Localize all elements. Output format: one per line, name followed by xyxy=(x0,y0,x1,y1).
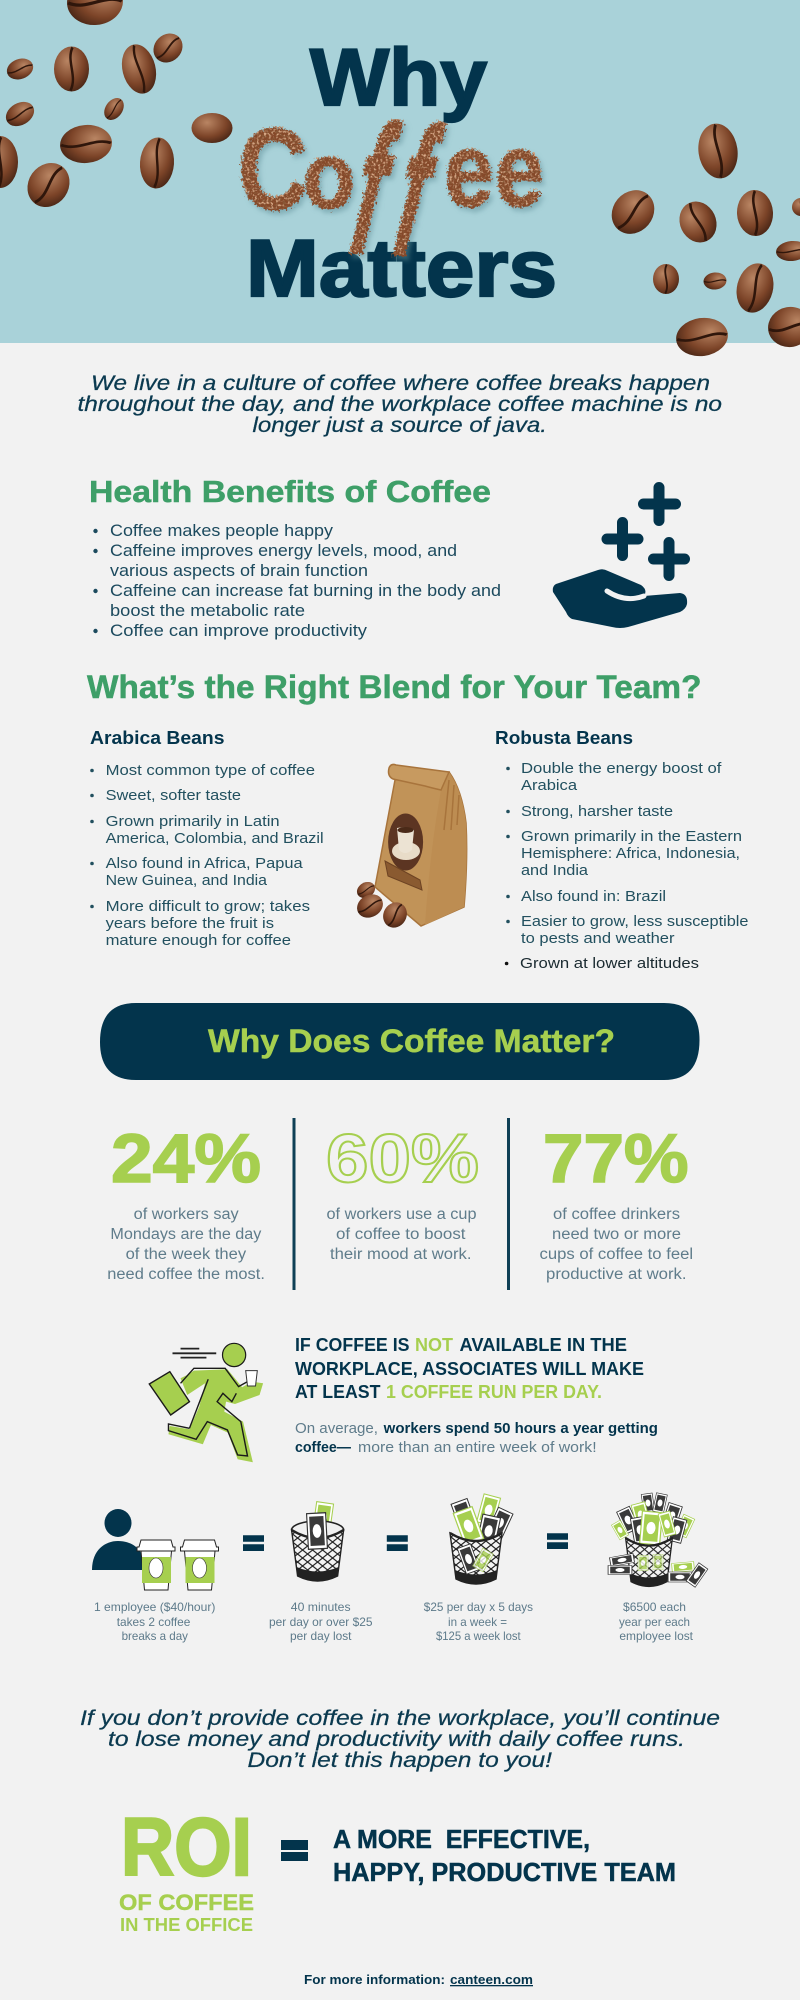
column: arabica beans xyxy=(90,728,324,949)
ROI result text: HAPPY, PRODUCTIVE TEAM xyxy=(333,1857,676,1887)
title: Matters: Matters xyxy=(246,224,557,314)
stat: 77 percent: 77% xyxy=(543,1120,689,1197)
coffee beans left xyxy=(0,0,232,215)
ROI result text: A MORE EFFECTIVE, xyxy=(333,1824,590,1854)
intro paragraph: longer just a source of java. xyxy=(252,413,547,437)
list: robusta: Arabica xyxy=(521,777,578,794)
list: robusta: Grown at lower altitudes xyxy=(520,955,699,972)
footer: For more information: xyxy=(304,1972,445,1987)
panel: ROI xyxy=(119,1802,676,1935)
caption: employee xyxy=(94,1600,215,1643)
list: arabica: Sweet, softer taste xyxy=(106,787,241,804)
closing paragraph: If you don’t provide coffee in the workplace, you’ll continue xyxy=(80,1706,720,1730)
icon: employee with two cups xyxy=(92,1509,218,1590)
ROI result text xyxy=(333,1824,676,1887)
coffee beans right xyxy=(603,121,800,359)
head xyxy=(222,1343,246,1367)
heading: health benefits: Health Benefits of Coffee xyxy=(89,474,491,509)
caption: 6500 each: year per each xyxy=(619,1615,690,1629)
subheading: arabica: Arabica Beans xyxy=(90,728,224,748)
list: health benefits: Caffeine can increase fat burning in the body and xyxy=(110,582,501,600)
list: arabica: mature enough for coffee xyxy=(106,932,291,949)
list: robusta: to pests and weather xyxy=(521,930,674,947)
stat: 77 percent: need two or more xyxy=(552,1226,681,1243)
title: Coffee in coffee grounds xyxy=(238,90,544,293)
list: arabica: Also found in Africa, Papua xyxy=(106,855,303,872)
column: robusta beans xyxy=(495,728,748,972)
panel: statistics xyxy=(107,1118,693,1290)
icon: running businessperson xyxy=(149,1343,263,1462)
stat: 24 percent: need coffee the most. xyxy=(107,1266,265,1283)
banner: why does coffee matter: Why Does Coffee Matter? xyxy=(208,1023,615,1059)
caption: employee: takes 2 coffee xyxy=(117,1615,191,1629)
stat: 24 percent: Mondays are the day xyxy=(110,1226,262,1243)
stat: 24 percent xyxy=(107,1120,265,1283)
stat: 77 percent xyxy=(540,1120,693,1283)
list: robusta: Grown primarily in the Eastern xyxy=(521,828,742,845)
speed lines xyxy=(172,1349,216,1358)
list: robusta xyxy=(505,760,748,972)
divider xyxy=(292,1118,296,1290)
equals sign three xyxy=(547,1533,568,1549)
list: arabica: years before the fruit is xyxy=(106,915,274,932)
panel: health benefits xyxy=(89,474,687,640)
caption: 6500 each xyxy=(619,1600,694,1643)
closing paragraph: Don’t let this happen to you! xyxy=(248,1748,552,1772)
caption: employee: 1 employee ($40/hour) xyxy=(94,1600,215,1614)
closing paragraph: to lose money and productivity with daily coffee runs. xyxy=(108,1727,685,1751)
stat: 77 percent: productive at work. xyxy=(546,1266,687,1283)
coffee cup one xyxy=(137,1540,175,1590)
footer xyxy=(304,1972,533,1987)
title: Coffee in coffee grounds: f xyxy=(376,92,454,293)
supporting text: more than an entire week of work! xyxy=(358,1440,597,1456)
icon: basket with several bills xyxy=(450,1494,513,1584)
intro paragraph: throughout the day, and the workplace coffee machine is no xyxy=(78,392,722,416)
list: robusta: Double the energy boost of xyxy=(521,760,722,777)
stat: 60 percent outline xyxy=(326,1120,479,1263)
caption: 25 per day: in a week = xyxy=(448,1615,507,1629)
stat: 77 percent: of coffee drinkers xyxy=(553,1206,680,1223)
title: Coffee in coffee grounds: e xyxy=(495,112,544,229)
stat: 24 percent: of the week they xyxy=(126,1246,246,1263)
coffee cup xyxy=(246,1371,257,1386)
list: arabica xyxy=(90,762,324,949)
headline: IF COFFEE IS xyxy=(295,1335,410,1355)
headline: AT LEAST xyxy=(295,1382,380,1402)
headline: NOT xyxy=(415,1335,453,1355)
list: robusta: and India xyxy=(521,862,589,879)
footer: canteen.com xyxy=(450,1972,533,1987)
icon: overflowing basket with money xyxy=(608,1493,708,1587)
caption: forty minutes: per day lost xyxy=(290,1629,352,1643)
headline: AVAILABLE IN THE xyxy=(460,1335,627,1355)
stat: 24 percent: of workers say xyxy=(134,1206,239,1223)
list: health benefits: various aspects of brain function xyxy=(110,562,368,580)
icon: hand with plus signs xyxy=(553,488,687,628)
panel: right blend xyxy=(87,669,748,972)
title: Why: Why xyxy=(310,33,487,123)
equals sign two xyxy=(387,1535,408,1551)
stat: 60 percent outline: of coffee to boost xyxy=(336,1226,466,1243)
caption: employee: breaks a day xyxy=(122,1629,188,1643)
caption: forty minutes: 40 minutes xyxy=(291,1600,351,1614)
icon: basket with one bill xyxy=(292,1502,344,1581)
list: robusta: Hemisphere: Africa, Indonesia, xyxy=(521,845,740,862)
bag label with cup xyxy=(385,814,423,890)
list: arabica: Grown primarily in Latin xyxy=(106,813,280,830)
supporting text: On average, xyxy=(295,1421,378,1437)
headline xyxy=(295,1335,644,1402)
list: health benefits xyxy=(93,522,501,640)
equals sign xyxy=(281,1840,308,1861)
ROI lockup: OF COFFEE xyxy=(119,1890,254,1915)
intro paragraph: We live in a culture of coffee where coffee breaks happen xyxy=(91,371,710,395)
stat: 60 percent outline: of workers use a cup xyxy=(326,1206,476,1223)
caption: 25 per day: $125 a week lost xyxy=(436,1629,521,1643)
text block: coffee run callout xyxy=(295,1335,658,1456)
stat: 77 percent: cups of coffee to feel xyxy=(540,1246,693,1263)
briefcase xyxy=(149,1372,189,1415)
list: robusta: Easier to grow, less susceptible xyxy=(521,913,748,930)
list: robusta: Strong, harsher taste xyxy=(521,803,673,820)
stat: 60 percent outline: 60% xyxy=(326,1120,479,1197)
intro paragraph xyxy=(78,371,722,437)
banner: why does coffee matter xyxy=(100,1003,700,1080)
list: arabica: America, Colombia, and Brazil xyxy=(106,830,324,847)
title: Coffee in coffee grounds: f xyxy=(333,90,411,291)
supporting text xyxy=(295,1421,658,1456)
coffee beans beside bag xyxy=(353,879,411,932)
list: health benefits: Coffee can improve productivity xyxy=(110,622,368,640)
ROI lockup: IN THE OFFICE xyxy=(120,1915,253,1935)
headline: WORKPLACE, ASSOCIATES WILL MAKE xyxy=(295,1359,644,1379)
subheading: robusta: Robusta Beans xyxy=(495,728,633,748)
list: health benefits: Coffee makes people happy xyxy=(110,522,334,540)
header panel xyxy=(0,0,800,359)
list: health benefits: Caffeine improves energy levels, mood, and xyxy=(110,542,457,560)
caption: 6500 each: employee lost xyxy=(619,1629,694,1643)
title: Coffee in coffee grounds: e xyxy=(444,112,494,229)
coffee cup two xyxy=(180,1540,218,1590)
caption: forty minutes xyxy=(269,1600,373,1643)
list: arabica: Most common type of coffee xyxy=(106,762,315,779)
caption: 25 per day xyxy=(424,1600,533,1643)
closing paragraph xyxy=(80,1706,720,1772)
list: arabica: More difficult to grow; takes xyxy=(106,898,310,915)
title: Coffee in coffee grounds: C xyxy=(238,104,308,234)
heading: right blend: What’s the Right Blend for Your Team? xyxy=(87,669,702,705)
supporting text: coffee— xyxy=(295,1440,351,1456)
panel: cost equation xyxy=(92,1493,708,1643)
caption: 6500 each: $6500 each xyxy=(623,1600,686,1614)
list: arabica: New Guinea, and India xyxy=(106,872,268,889)
headline: 1 COFFEE RUN PER DAY. xyxy=(386,1382,602,1402)
ROI lockup xyxy=(119,1802,254,1935)
stat: 24 percent: 24% xyxy=(111,1120,261,1197)
supporting text: workers spend 50 hours a year getting xyxy=(383,1421,658,1437)
list: robusta: Also found in: Brazil xyxy=(521,888,666,905)
list: health benefits: boost the metabolic rate xyxy=(110,602,305,620)
caption: 25 per day: $25 per day x 5 days xyxy=(424,1600,533,1614)
icon: coffee bag xyxy=(353,764,467,932)
divider xyxy=(507,1118,510,1290)
caption: forty minutes: per day or over $25 xyxy=(269,1615,373,1629)
equals sign one xyxy=(243,1535,264,1551)
title: Coffee in coffee grounds: o xyxy=(303,123,355,229)
ROI lockup: ROI xyxy=(121,1802,252,1893)
stat: 60 percent outline: their mood at work. xyxy=(330,1246,472,1263)
